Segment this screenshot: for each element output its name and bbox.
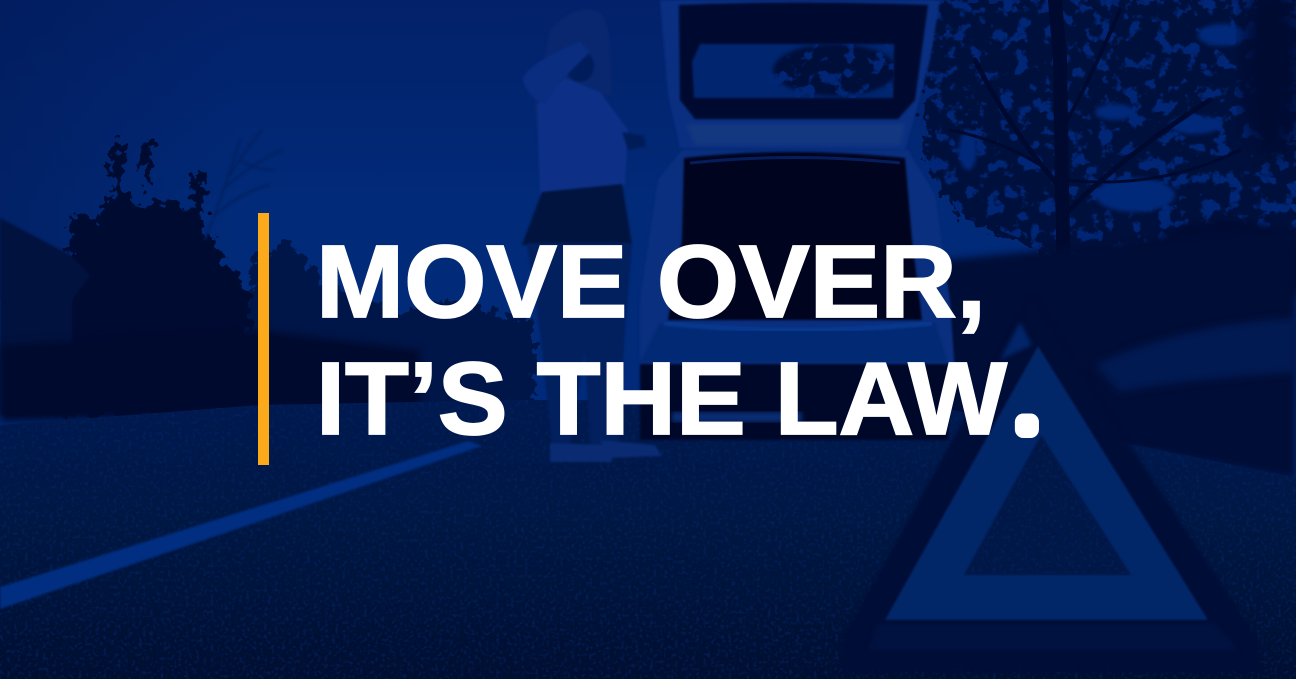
tailgate window xyxy=(692,44,894,98)
illustration: warning triangle xyxy=(842,296,1260,672)
car bumper highlight xyxy=(664,323,932,330)
tree crown base xyxy=(925,0,1296,262)
raised arm xyxy=(523,42,590,105)
sky showing through the leaves xyxy=(925,0,1296,262)
open tailgate xyxy=(660,0,940,150)
distant hedge xyxy=(250,240,535,415)
triangle inner grain xyxy=(971,442,1128,573)
trunk and branches xyxy=(950,0,1240,330)
car body xyxy=(640,150,955,372)
tailgate lower band xyxy=(686,124,905,145)
car bumper xyxy=(640,322,948,362)
far right dark foliage xyxy=(1242,0,1296,160)
illustration: stranded woman xyxy=(522,9,662,462)
triangle reflective band xyxy=(885,346,1208,620)
headline line 2: . xyxy=(1020,384,1034,440)
triangle frame xyxy=(842,296,1260,672)
shirt torso xyxy=(537,78,628,196)
left tree bare branches xyxy=(205,130,282,240)
car boot interior xyxy=(668,152,922,320)
triangle inner window xyxy=(964,435,1131,575)
road marking: white edge line xyxy=(0,441,482,609)
illustration: broken-down car xyxy=(640,0,955,440)
triangle base stand xyxy=(868,624,1238,650)
shoes xyxy=(550,440,662,462)
headline xyxy=(316,224,1034,456)
texture: road grain xyxy=(0,400,1296,679)
lit patch under car xyxy=(672,412,802,422)
left tree mass xyxy=(60,141,262,415)
background: left house xyxy=(0,218,90,415)
car lower shadow xyxy=(640,364,952,440)
hair xyxy=(533,9,612,140)
headline line 2: IT’S THE LAW xyxy=(316,341,1008,456)
triangle frame lit upper edge xyxy=(1000,322,1032,360)
background: left tree line xyxy=(60,130,535,415)
background: left side sky shading xyxy=(0,0,240,300)
car boot lit edge xyxy=(690,158,900,163)
accent bar xyxy=(258,213,269,465)
larger sky gaps xyxy=(959,24,1246,212)
face shadow xyxy=(566,50,594,82)
background: roadside bushes and grass xyxy=(925,225,1296,480)
other hand xyxy=(622,132,646,150)
trousers xyxy=(527,243,632,445)
background: low hedge xyxy=(0,330,420,422)
background: lit grass patch xyxy=(1095,318,1296,392)
tied jacket skirt xyxy=(522,184,632,245)
tailgate dark panel xyxy=(679,2,928,119)
headline line 1: MOVE OVER, xyxy=(316,224,986,339)
tree reflection in window xyxy=(770,44,897,98)
background: asphalt road xyxy=(0,400,1296,679)
background: right tree xyxy=(925,0,1296,330)
